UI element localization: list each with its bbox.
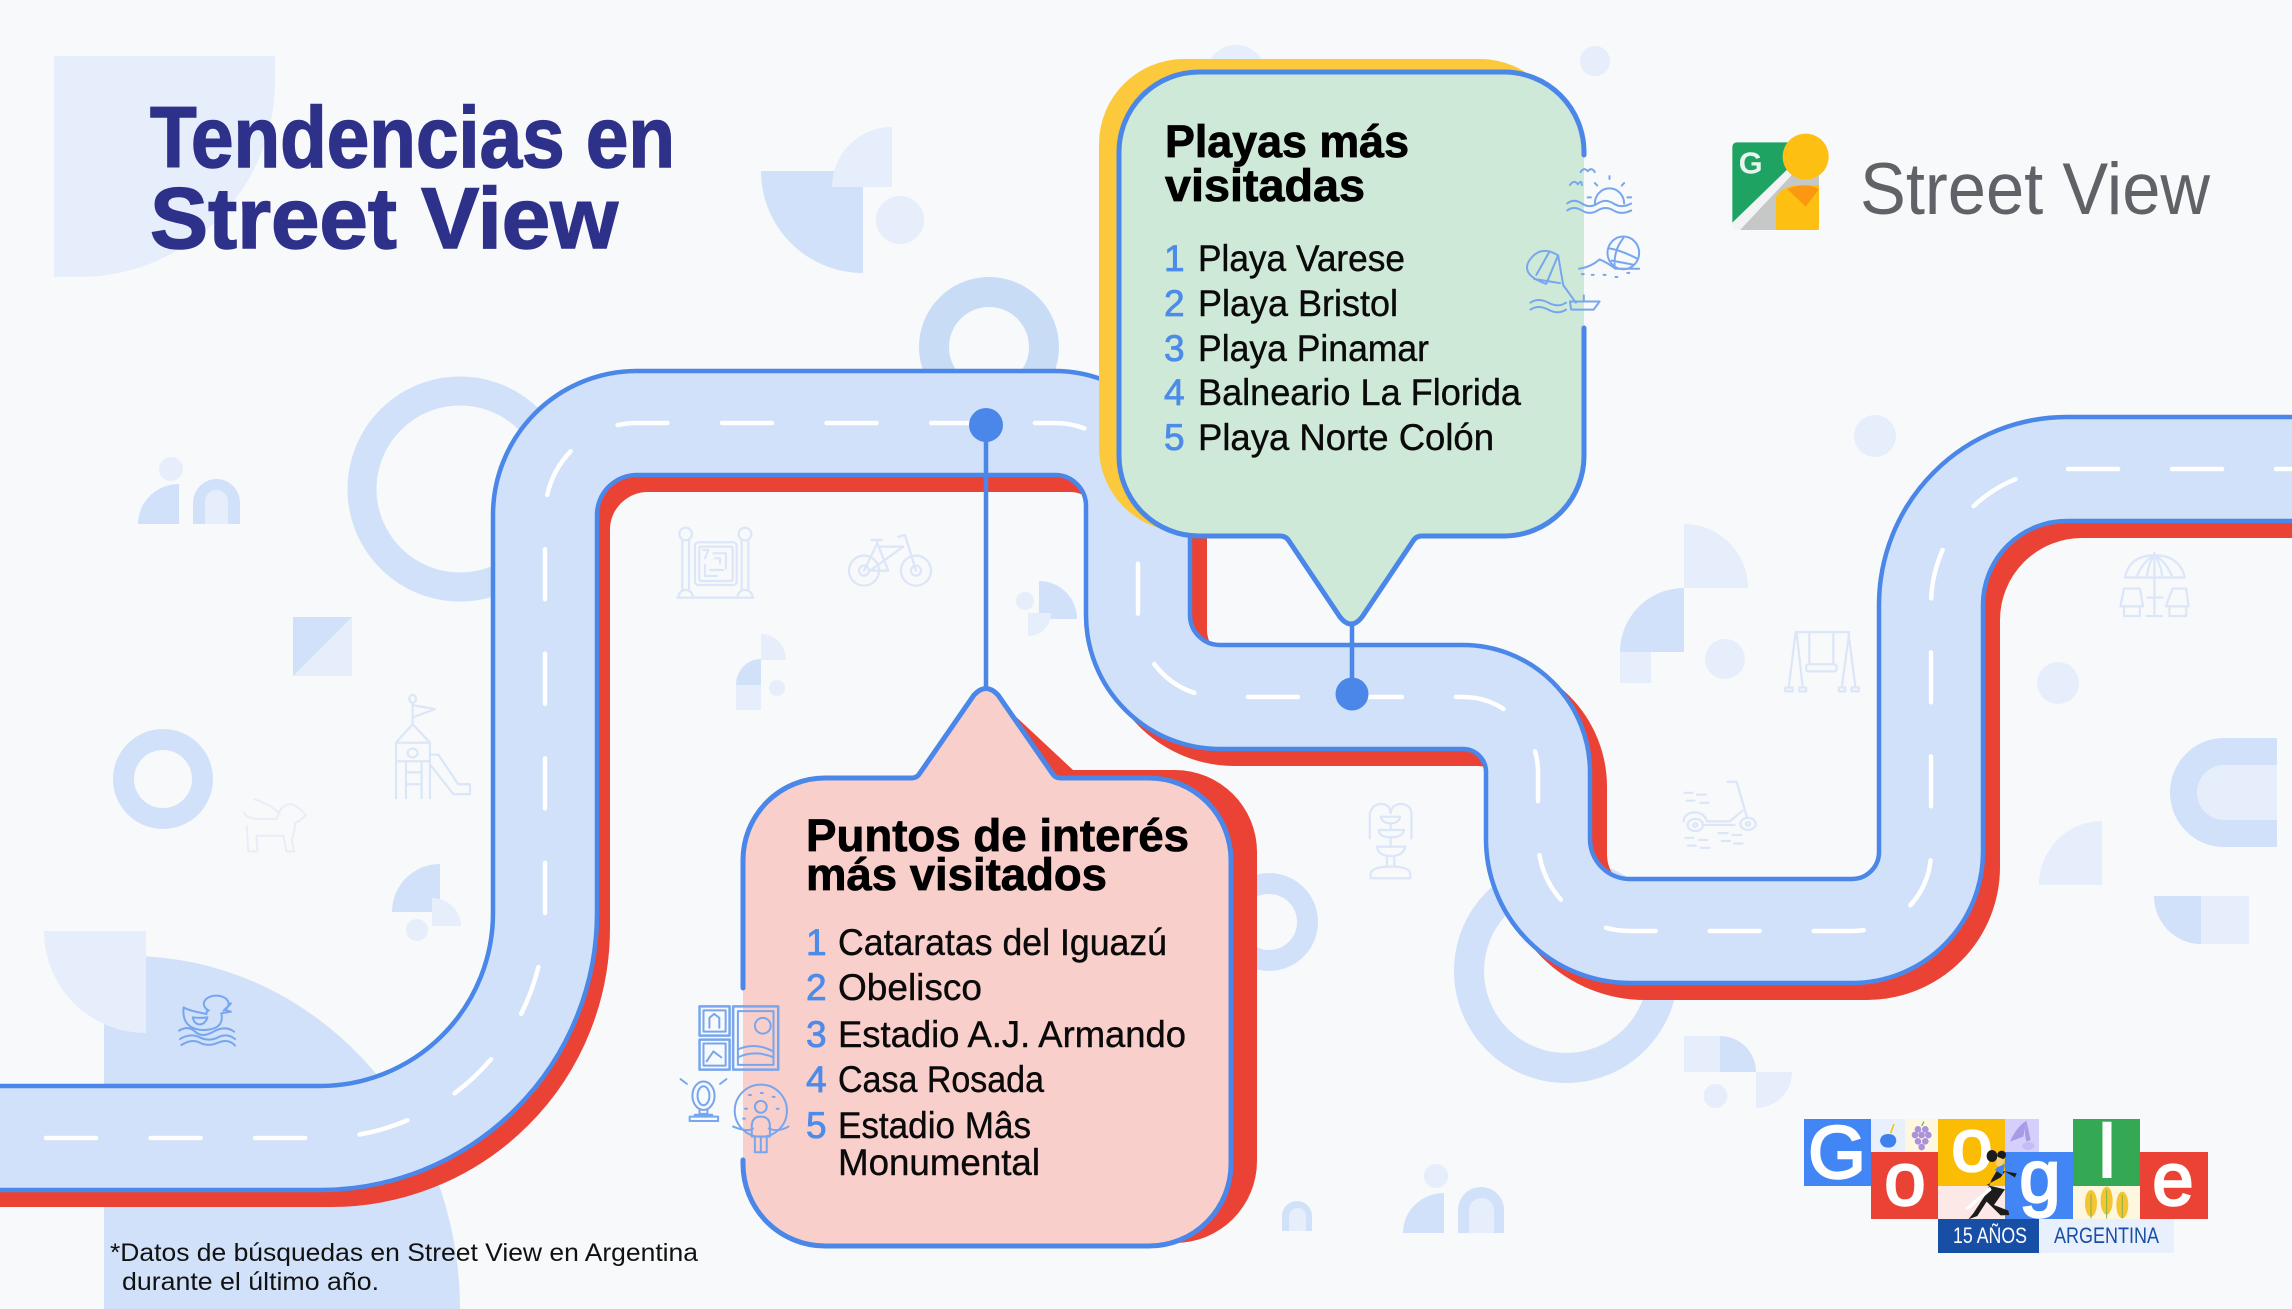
- connector: playas to road: [1336, 620, 1368, 710]
- title: [150, 90, 675, 267]
- icon: street view pegman: G: [1739, 146, 1763, 180]
- letters: G: [1808, 1111, 1866, 1194]
- icon: bicycle: [849, 535, 931, 586]
- street view logo: [1732, 134, 2210, 230]
- google 15 años argentina logo: g: [2019, 1135, 2061, 1218]
- ranked list: Playa Pinamar: [1198, 328, 1429, 369]
- icon: beach umbrella and chairs: [2120, 553, 2188, 616]
- icon: playground slide: [396, 695, 470, 798]
- road: [0, 423, 2292, 1153]
- road centre dashes, west half: [46, 423, 1000, 1138]
- icon: volleyball on sand: [1579, 237, 1639, 277]
- heading: [806, 810, 1189, 900]
- ranked list: 3: [1164, 328, 1185, 369]
- road centre dashes, east half: [1035, 423, 2292, 931]
- icon: parasail and boat: [1527, 251, 1600, 312]
- ranked list: 2: [1164, 283, 1185, 324]
- red shadow: [1000, 713, 1257, 1243]
- letter tiles: [1804, 1119, 1871, 1186]
- heading: visitadas: [1165, 160, 1365, 211]
- icon: scooter: [1684, 782, 1756, 848]
- ranked list: Casa Rosada: [838, 1059, 1044, 1100]
- ranked list: 2: [806, 967, 827, 1008]
- ranked list: Obelisco: [838, 967, 982, 1008]
- heading: Playas más: [1165, 116, 1409, 167]
- title: Street View: [150, 171, 619, 267]
- icon: maze: [677, 528, 753, 598]
- ranked list: Playa Varese: [1198, 238, 1405, 279]
- ranked list: Monumental: [838, 1142, 1040, 1183]
- icon: fountain: [1370, 804, 1411, 878]
- google 15 años argentina logo: l: [2099, 1110, 2115, 1193]
- decorations: mate, grapes, jacaranda, wheat, tango dancers: [1880, 1121, 2128, 1219]
- icon: swing: [1785, 632, 1859, 691]
- ranked list: Cataratas del Iguazú: [838, 922, 1167, 963]
- ranked list: Playa Bristol: [1198, 283, 1398, 324]
- ranked list: 4: [1164, 372, 1185, 413]
- ranked list: 4: [806, 1059, 827, 1100]
- icon: person under dome: [733, 1085, 789, 1152]
- google 15 años argentina logo: ARGENTINA: [2054, 1223, 2159, 1248]
- google 15 años argentina logo: e: [2152, 1138, 2194, 1221]
- icon: museum frames: [700, 1006, 778, 1070]
- ranked list: 5: [806, 1105, 827, 1146]
- google 15 años argentina logo: o: [1884, 1138, 1926, 1221]
- wordmark: Street View: [1860, 149, 2210, 230]
- ranked list: Estadio A.J. Armando: [838, 1014, 1186, 1055]
- ranked list: Estadio Mâs: [838, 1105, 1031, 1146]
- heading: más visitados: [806, 849, 1107, 900]
- ranked list: 1: [806, 922, 827, 963]
- icon: sunset over sea: [1567, 169, 1631, 213]
- bubble outline: [743, 688, 1231, 1246]
- footnote: durante el último año.: [122, 1268, 379, 1296]
- heading: Puntos de interés: [806, 810, 1189, 861]
- ranked list: 5: [1164, 417, 1185, 458]
- bubble outline: [1119, 72, 1584, 624]
- title: Tendencias en: [150, 90, 675, 186]
- panel: puntos de interés más visitados: [743, 688, 1257, 1246]
- ranked list: Balneario La Florida: [1198, 372, 1521, 413]
- heading: [1165, 116, 1409, 211]
- bubble fill: [743, 688, 1231, 1246]
- yellow shadow: [1099, 59, 1565, 532]
- footnote: *Datos de búsquedas en Street View en Argentina: [110, 1239, 698, 1267]
- ranked list: 3: [806, 1014, 827, 1055]
- icon: street view pegman: [1732, 134, 1829, 230]
- icon: dog: [244, 799, 306, 851]
- footnote: [110, 1239, 698, 1296]
- ranked list: Playa Norte Colón: [1198, 417, 1494, 458]
- google 15 años argentina logo: o: [1951, 1104, 1993, 1187]
- icon: museum bust: [681, 1079, 726, 1121]
- connector: puntos de interés to road: [969, 408, 1003, 692]
- ranked list: 1: [1164, 238, 1185, 279]
- bubble fill: [1119, 72, 1584, 624]
- ranked list: [806, 922, 1186, 1183]
- icon: duck: [179, 996, 235, 1046]
- ranked list: [1164, 238, 1521, 458]
- panel: playas más visitadas: [1099, 59, 1584, 624]
- google 15 años argentina logo: [1804, 1104, 2208, 1253]
- badge labels: 15 AÑOS: [1953, 1223, 2027, 1248]
